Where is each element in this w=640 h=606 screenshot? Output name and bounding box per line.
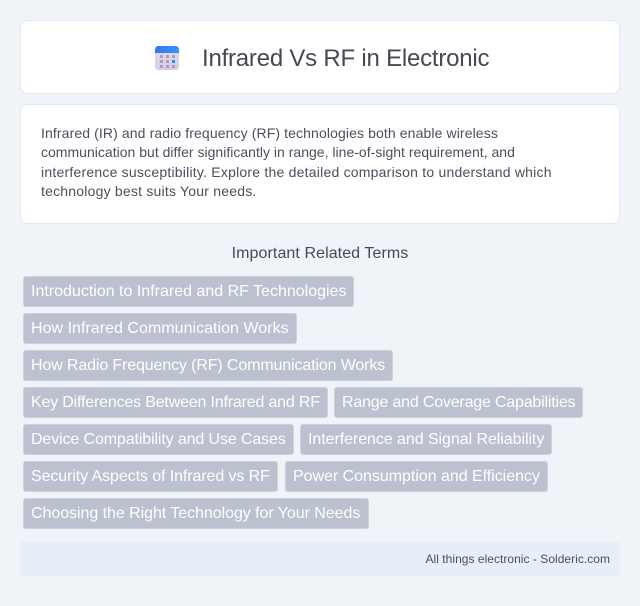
heading: related terms: Important Related Terms	[232, 245, 408, 262]
icon: calendar	[155, 46, 179, 70]
tag	[23, 461, 278, 492]
tag	[334, 387, 583, 418]
tag	[23, 313, 297, 344]
title: Infrared Vs RF in Electronic	[202, 45, 489, 72]
tag: Choosing the Right Technology for Your Needs	[31, 505, 360, 522]
footer	[20, 542, 620, 576]
tag: Key Differences Between Infrared and RF	[31, 394, 320, 411]
intro paragraph: interference susceptibility. Explore the detailed comparison to understand which	[41, 164, 552, 180]
tag: Range and Coverage Capabilities	[342, 394, 575, 411]
footer credit: All things electronic - Solderic.com	[426, 552, 610, 566]
tag: How Infrared Communication Works	[31, 320, 289, 337]
tag	[23, 498, 369, 529]
tag: Device Compatibility and Use Cases	[31, 431, 286, 448]
tag	[285, 461, 548, 492]
tag	[23, 276, 354, 307]
tag list	[23, 276, 583, 529]
panel: intro text	[20, 104, 620, 224]
intro paragraph: technology best suits Your needs.	[41, 183, 257, 199]
tag: How Radio Frequency (RF) Communication Works	[31, 357, 385, 374]
intro paragraph	[41, 125, 552, 199]
tag: Interference and Signal Reliability	[308, 431, 544, 448]
tag	[23, 387, 328, 418]
intro paragraph: Infrared (IR) and radio frequency (RF) technologies both enable wireless	[41, 125, 498, 141]
tag: Introduction to Infrared and RF Technologies	[31, 283, 346, 300]
tag: Security Aspects of Infrared vs RF	[31, 468, 270, 485]
tag: Power Consumption and Efficiency	[293, 468, 540, 485]
title card	[20, 20, 620, 94]
tag	[23, 424, 294, 455]
tag	[300, 424, 552, 455]
intro paragraph: communication but differ significantly in range, line-of-sight requirement, and	[41, 144, 515, 160]
tag	[23, 350, 393, 381]
